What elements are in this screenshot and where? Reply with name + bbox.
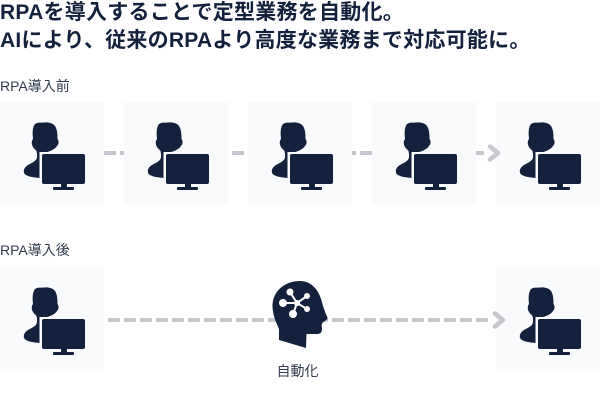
arrow: row 2 dashed connector [108,314,503,326]
icon: person at monitor start [24,287,85,355]
panel: before step 1 [0,102,104,205]
panel: before step 3 [248,102,352,205]
icon: person at monitor 4 [396,122,457,190]
icon: person at monitor 5 [520,122,581,190]
panel: after start [0,267,104,371]
panel: before step 2 [124,102,228,205]
icon: AI head [272,281,327,348]
icon: person at monitor 2 [148,122,209,190]
network nodes [280,290,309,317]
panel: before step 4 [372,102,476,205]
heading: after RPA: RPA導入後 [0,242,70,258]
title [0,1,531,52]
label: automation: 自動化 [276,363,318,379]
panel: before step 5 [496,102,600,205]
title: RPAを導入することで定型業務を自動化。 [0,1,404,24]
arrow: row 1 arrowhead [490,146,498,160]
icon: person at monitor end [520,287,581,355]
icon: person at monitor 1 [24,122,85,190]
icon: person at monitor 3 [272,122,333,190]
title: AIにより、従来のRPAより高度な業務まで対応可能に。 [0,29,531,52]
panel: after end [496,267,600,371]
heading: before RPA: RPA導入前 [0,78,70,94]
arrow: row 1 dashed connector [104,151,486,155]
